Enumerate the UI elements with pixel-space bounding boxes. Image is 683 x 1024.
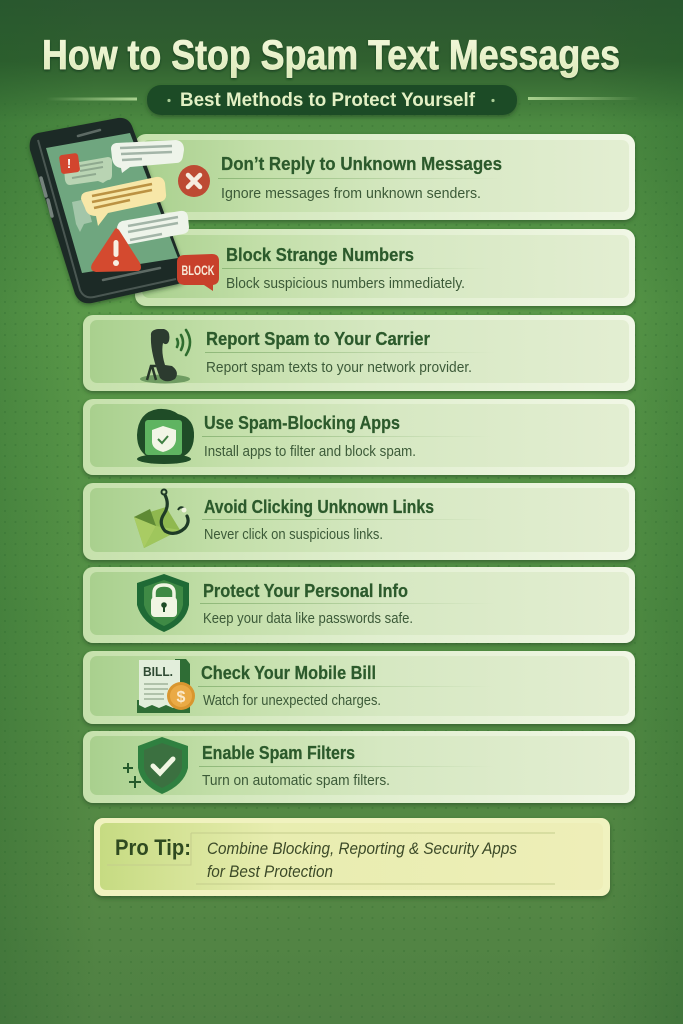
panel: don't reply: Don’t Reply to Unknown Messages — [221, 153, 502, 174]
panel: personal info: Keep your data like passwords safe. — [203, 610, 413, 627]
panel: mobile bill: Check Your Mobile Bill — [201, 662, 376, 683]
icon: shield check — [123, 737, 188, 794]
icon: shield lock — [137, 574, 189, 632]
alert tag: ! — [67, 156, 71, 171]
panel: report spam — [83, 315, 635, 391]
panel: apps — [83, 399, 635, 475]
panel: pro tip: Combine Blocking, Reporting & Security Apps — [207, 839, 517, 858]
panel: apps: Install apps to filter and block spam. — [204, 443, 416, 460]
message: white bubble — [111, 140, 184, 173]
panel: report spam: Report spam texts to your network provider. — [206, 359, 472, 376]
speaker — [78, 130, 100, 136]
icon: phone handset — [140, 329, 190, 384]
icon: red x — [178, 165, 210, 197]
icon: bill and coin: $ — [177, 689, 186, 706]
panel: pro tip: for Best Protection — [207, 862, 333, 881]
message: lower white bubble — [117, 211, 189, 244]
panel: pro tip: Pro Tip: — [115, 835, 191, 860]
panel: links: Avoid Clicking Unknown Links — [204, 496, 434, 517]
home bar — [103, 268, 160, 280]
icon: block badge: BLOCK — [182, 262, 214, 278]
icon: phishing envelope — [134, 490, 188, 548]
alert tag — [59, 153, 80, 174]
message: grey bubble — [64, 157, 112, 185]
icon: warning triangle — [91, 228, 141, 272]
panel: report spam: Report Spam to Your Carrier — [206, 328, 430, 349]
panel: personal info — [83, 567, 635, 643]
panel: spam filters: Turn on automatic spam filters. — [202, 772, 390, 789]
panel: apps: Use Spam-Blocking Apps — [204, 412, 400, 433]
panel: block numbers — [135, 229, 635, 306]
phone body — [30, 118, 186, 303]
message: yellow bubble — [81, 177, 166, 226]
panel: spam filters: Enable Spam Filters — [202, 742, 355, 763]
icon: app shield — [137, 409, 194, 464]
icon: bill and coin: BILL. — [143, 664, 173, 679]
panel: personal info: Protect Your Personal Info — [203, 580, 408, 601]
panel: mobile bill: Watch for unexpected charges. — [203, 692, 381, 709]
panel: don't reply: Ignore messages from unknown senders. — [221, 185, 481, 202]
subtitle banner: Best Methods to Protect Yourself — [180, 90, 476, 111]
panel: links — [83, 483, 635, 560]
subtitle banner — [46, 85, 640, 115]
panel: links: Never click on suspicious links. — [204, 526, 383, 543]
panel: block numbers: Block Strange Numbers — [226, 244, 414, 265]
icon: bill and coin — [137, 659, 195, 713]
side buttons — [41, 178, 52, 216]
panel: block numbers: Block suspicious numbers immediately. — [226, 275, 465, 292]
panel: don't reply — [135, 134, 635, 220]
panel: mobile bill — [83, 651, 635, 724]
phone screen — [46, 133, 178, 273]
panel: pro tip — [94, 818, 610, 896]
icon: block badge — [177, 254, 219, 291]
panel: spam filters — [83, 731, 635, 803]
illustration: phone with spam messages — [30, 118, 219, 303]
message: behind bubble — [72, 199, 92, 232]
